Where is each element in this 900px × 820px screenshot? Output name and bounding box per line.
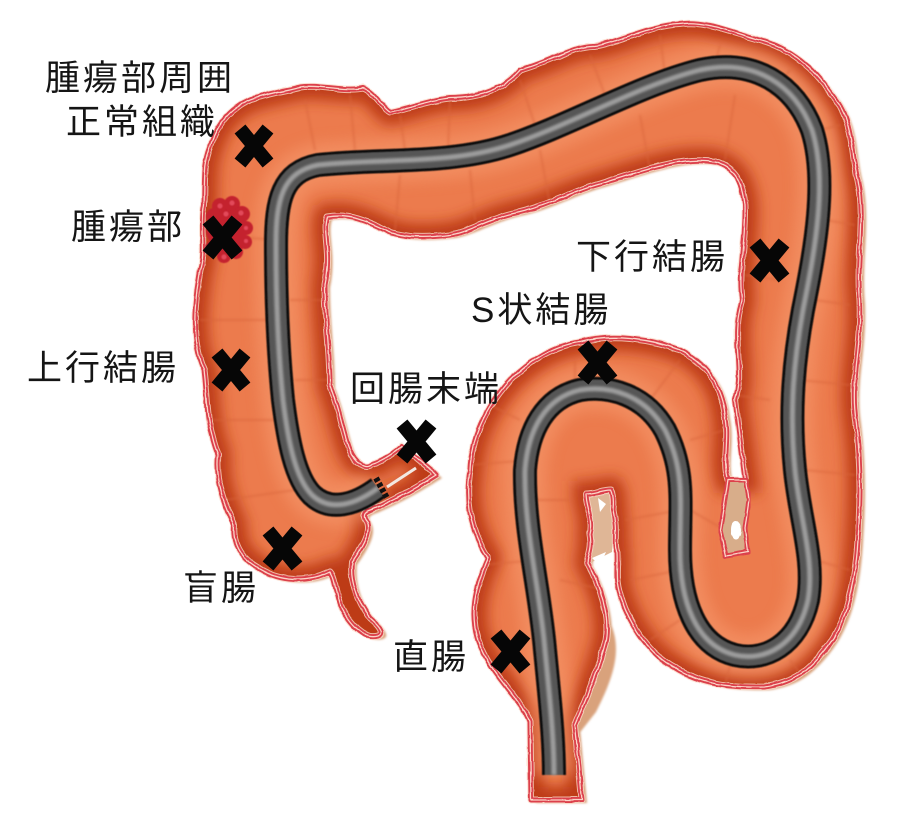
- label: cecum: 盲腸: [183, 569, 259, 608]
- label: ascending colon: 上行結腸: [27, 349, 179, 388]
- endoscope: [276, 67, 819, 775]
- marker: cecum: [268, 531, 297, 566]
- tumor: [205, 196, 253, 263]
- slit between rectum and sigmoid: [587, 491, 614, 562]
- endoscope tip: [376, 468, 416, 498]
- label: tumor periphery normal tissue: 正常組織: [66, 103, 218, 142]
- tan shadow: [200, 26, 866, 803]
- marker: sigmoid colon: [583, 345, 612, 380]
- marker: ascending colon: [217, 353, 245, 387]
- label: tumor periphery normal tissue: 腫瘍部周囲: [45, 59, 235, 98]
- slit highlights: [592, 498, 606, 566]
- gap between bowel loops: [720, 480, 749, 556]
- label: tumor: 腫瘍部: [71, 208, 185, 247]
- label: terminal ileum: 回腸末端: [350, 370, 502, 409]
- label: tumor periphery normal tissue: [45, 59, 235, 142]
- colon body: [195, 23, 861, 800]
- labels: [27, 59, 728, 677]
- markers: [208, 129, 784, 669]
- colon outline: [195, 23, 861, 800]
- marker: rectum: [496, 634, 525, 669]
- label: descending colon: 下行結腸: [576, 238, 728, 277]
- marker: descending colon: [755, 243, 784, 278]
- folds: [200, 35, 855, 685]
- colon illustration: [195, 23, 866, 803]
- label: sigmoid colon: S状結腸: [471, 291, 611, 330]
- label: rectum: 直腸: [393, 638, 469, 677]
- marker: tumor: [208, 220, 237, 255]
- marker: tumor periphery: [240, 129, 268, 163]
- marker: terminal ileum: [402, 424, 431, 459]
